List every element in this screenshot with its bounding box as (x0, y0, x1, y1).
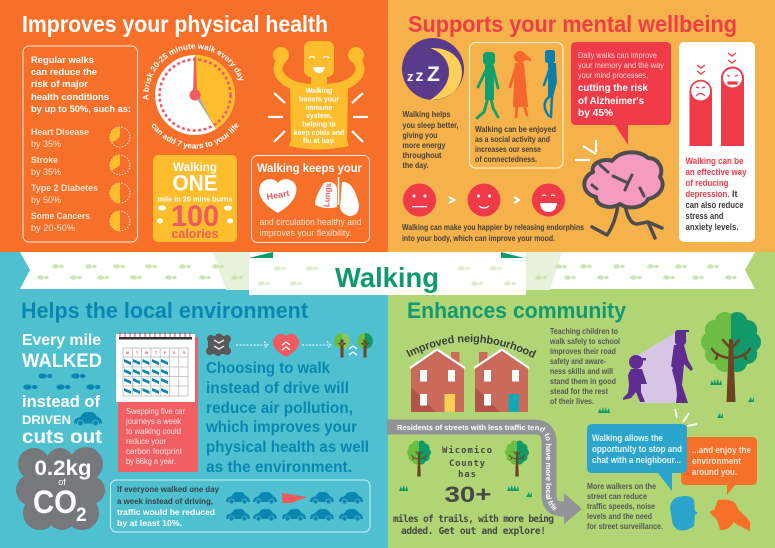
callout: Alzheimer's: your memory and the way (578, 60, 665, 70)
panel: major health conditions (23, 46, 138, 242)
icon: happy brain running (575, 140, 663, 238)
panel: depression: Walking can be (686, 156, 744, 166)
list: conditions: Type 2 Diabetes (31, 183, 98, 194)
icon: calendar: T (136, 351, 139, 355)
text: immune system: system, (306, 113, 332, 120)
text: regular walks: risk of major (31, 79, 88, 90)
panel: depression: It (732, 189, 738, 199)
text: teaching children: ness skills and will (550, 366, 613, 376)
background: community quadrant (388, 252, 775, 548)
panel: traffic reduced: If everyone walked one day (117, 484, 219, 494)
text block: every mile walked: Every mile (22, 332, 101, 349)
icon: two houses (410, 350, 529, 412)
icon: calendar: F (164, 351, 167, 355)
text: more walkers: levels and the need (587, 511, 652, 521)
panel: walking keeps your heart and lungs (252, 156, 370, 242)
panel: calendar and carbon footprint: journeys a week (125, 416, 182, 426)
text: immune system: flu at bay. (303, 138, 335, 145)
text: sleep better: giving you (402, 130, 438, 140)
text: teaching children: stand them in good (550, 376, 616, 386)
list: conditions: Heart Disease (31, 127, 89, 138)
callout: Alzheimer's (571, 42, 671, 145)
icon: rows of cars (226, 492, 363, 521)
callout: chat with a neighbour: Walking allows the (592, 433, 663, 443)
panel: depression: stress and (686, 211, 724, 221)
text: sleep better: you sleep better, (402, 120, 458, 130)
text: teaching children: of their lives. (550, 396, 594, 406)
icon: moon and zzz: z (407, 69, 414, 84)
text: teaching children: safety and aware- (550, 356, 606, 366)
clock: brisk walk (142, 44, 244, 150)
heading: mental wellbeing: Supports your mental wellbeing (408, 11, 737, 37)
icon: footprints (23, 373, 100, 390)
text: choosing to walk: instead of drive will (206, 380, 349, 397)
text: sleep better (402, 109, 458, 170)
text block: every mile walked (22, 332, 103, 448)
text: Wicomico County trails: added. Get out and explore! (401, 526, 546, 537)
clock: brisk walk: can add 7 years to your life (152, 124, 239, 150)
text: choosing to walk: as the environment. (206, 459, 352, 476)
icon: sad bars (690, 53, 744, 146)
icon: calendar: W (145, 351, 149, 355)
callout: enjoy the environment: environment (692, 456, 741, 466)
panel: social activity (470, 42, 563, 168)
text: regular walks: can reduce the (31, 67, 97, 78)
callout: Alzheimer's: Daily walks can improve (578, 50, 657, 60)
text: regular walks (31, 55, 131, 115)
icon: adult and child walking (623, 330, 693, 403)
arrow road with text: Residents of streets with less traffic tend to have more local friends (398, 424, 556, 510)
panel: social activity: as a social activity and (475, 134, 550, 144)
panel: depression: anxiety levels. (686, 222, 738, 232)
panel: depression (679, 42, 755, 242)
list: conditions: Stroke (31, 155, 58, 166)
list: conditions (31, 127, 98, 234)
text: immune system: helping to (302, 122, 336, 128)
cloud: CO2: CO (33, 484, 77, 520)
text: choosing to walk: reduce air pollution, (206, 400, 353, 417)
heading: physical health: Improves your physical health (22, 11, 328, 37)
icon: three faces (403, 184, 565, 216)
text: immune system (294, 88, 344, 145)
background: physical health quadrant (0, 0, 388, 252)
callout: Alzheimer's: of Alzheimer's (578, 96, 644, 107)
panel: social activity: Walking can be enjoyed (475, 124, 556, 134)
text: more walkers: More walkers on the (587, 481, 656, 491)
panel: depression: of reducing (686, 178, 728, 188)
text: endorphins: Walking can make you happier by releasing endorphins (402, 222, 584, 232)
icon: moon and zzz (402, 38, 464, 100)
text: regular walks: by up to 50%, such as: (31, 104, 131, 115)
panel: traffic reduced: by at least 10%. (117, 518, 182, 528)
text block: every mile walked: cuts out (22, 427, 103, 448)
panel: calendar and carbon footprint: to walking could (126, 426, 181, 436)
callout: chat with a neighbour: chat with a neighbour... (592, 455, 681, 465)
icon: calendar (116, 332, 195, 402)
banner title: Walking (335, 262, 439, 293)
callout: enjoy the environment: around you. (692, 467, 737, 477)
cloud: CO2: 0.2kg (34, 457, 92, 480)
icon: calendar: S (173, 351, 176, 355)
text: endorphins: into your body, which can improve your mood. (402, 233, 555, 243)
text: immune system: Walking (306, 88, 332, 95)
list: conditions: by 35% (31, 139, 62, 150)
text: endorphins (402, 222, 584, 243)
panel: walking one mile: Walking (173, 160, 217, 174)
panel: traffic reduced: a week instead of driving, (117, 496, 213, 506)
panel: traffic reduced: traffic would be reduced (117, 507, 215, 517)
callout: Alzheimer's: cutting the risk (578, 83, 648, 94)
text: teaching children: walk safely to school (549, 336, 620, 346)
text: sleep better: the day. (402, 160, 428, 170)
decorative grass (399, 379, 754, 497)
panel: depression: can also reduce (686, 200, 744, 210)
text: Wicomico County trails: miles of trails, with more being (393, 514, 554, 525)
icon: calendar: T (155, 351, 158, 355)
list: conditions: Some Cancers (31, 211, 90, 222)
text: Wicomico County trails (393, 445, 554, 537)
text: teaching children: stead for the rest (550, 386, 608, 396)
text: choosing to walk: Choosing to walk (206, 360, 330, 377)
text: teaching children: Teaching children to (550, 326, 618, 336)
icon row: cloud to heart to trees (206, 333, 373, 357)
panel: walking one mile: calories (172, 227, 219, 241)
background: mental wellbeing quadrant (388, 0, 775, 252)
callout: Alzheimer's: by 45% (578, 108, 613, 119)
icon: calendar: S (183, 351, 186, 355)
panel: depression: depression. (686, 189, 730, 199)
text: regular walks: Regular walks (31, 55, 94, 66)
panel: walking one mile: 100 (171, 200, 219, 233)
icon: lungs: Lungs (322, 182, 333, 207)
text: immune system: boosts your (299, 96, 339, 104)
text: immune system: immune (306, 105, 333, 112)
icon: car (74, 412, 102, 426)
heading: local environment: Helps the local environment (21, 298, 308, 323)
text: teaching children: improves their road (550, 346, 616, 356)
icon: blue head (670, 496, 698, 530)
panel: traffic reduced (110, 480, 370, 532)
cloud: CO2 (16, 447, 105, 530)
text: sleep better: more energy (402, 140, 446, 150)
panel: social activity: increases our sense (475, 144, 541, 154)
panel: depression: an effective way (686, 167, 746, 177)
arrow road with text (387, 420, 582, 524)
icon: calendar: M (126, 351, 129, 355)
heading: enhances community: Enhances community (407, 298, 626, 323)
callout: enjoy the environment: ...and enjoy the (692, 445, 751, 455)
panel: walking one mile (153, 155, 237, 242)
icon: orange head (710, 500, 750, 531)
list: conditions: by 35% (31, 167, 62, 178)
panel: walking keeps your heart and lungs: and circulation healthy and (260, 217, 362, 227)
icon: green walker (477, 52, 498, 118)
callout: Alzheimer's: your mind processes, (578, 70, 648, 80)
panel: calendar and carbon footprint: carbon footprint (126, 446, 183, 456)
text: immune system: keep colds and (294, 130, 344, 137)
text: sleep better: Walking helps (402, 109, 451, 119)
panel: walking keeps your heart and lungs: Walking keeps your (257, 163, 363, 175)
banner ribbon (20, 252, 755, 295)
cloud: CO2: 2 (76, 505, 87, 526)
panel: walking one mile: mile in 20 mins burns (158, 194, 232, 204)
text: Wicomico County trails: Wicomico (442, 445, 492, 456)
text: regular walks: health conditions (31, 92, 109, 103)
callout: enjoy the environment (681, 437, 757, 495)
cloud: CO2: of (58, 477, 66, 487)
panel: calendar and carbon footprint: reduce your (126, 436, 166, 446)
text: choosing to walk (205, 360, 369, 476)
text: Wicomico County trails: has (458, 470, 476, 480)
icon: strong figure with immune text (268, 41, 368, 150)
text: choosing to walk: physical health as well (206, 439, 369, 456)
text: Wicomico County trails: County (449, 459, 486, 469)
list: conditions: by 50% (31, 195, 62, 206)
text: choosing to walk: which improves your (205, 419, 357, 436)
background: environment quadrant (0, 252, 388, 548)
icon: orange walker (510, 51, 531, 117)
curved label: improved neighbourhoods: Improved neighbourhoods (406, 334, 536, 358)
text: sleep better: throughout (402, 150, 442, 160)
text: teaching children (549, 326, 620, 406)
text: more walkers: street can reduce (587, 491, 647, 501)
curved label: improved neighbourhoods (406, 334, 536, 358)
callout: chat with a neighbour (587, 424, 687, 491)
icon: blue walker (544, 50, 557, 117)
text: Wicomico County trails: 30+ (444, 482, 492, 507)
panel: social activity: of connectedness. (475, 154, 537, 164)
clock: brisk walk: A brisk 20-25 minute walk every day (142, 44, 244, 100)
callout: chat with a neighbour: opportunity to stop and (592, 444, 682, 454)
text: more walkers: for street surveillance. (587, 521, 663, 531)
icon: sweat drops (157, 206, 233, 224)
icon: moon and zzz: z (416, 68, 424, 85)
small trees (407, 440, 529, 476)
list: conditions: by 20-50% (31, 223, 76, 234)
panel: calendar and carbon footprint: Swapping five car (126, 406, 185, 416)
text: more walkers (587, 481, 663, 531)
icon: large tree (701, 312, 761, 402)
icon: heart: Heart (266, 188, 290, 202)
text block: every mile walked: instead of (22, 393, 100, 411)
text block: every mile walked: DRIVEN (22, 413, 71, 427)
text: more walkers: traffic speeds, noise (587, 501, 655, 511)
text block: every mile walked: WALKED (22, 351, 102, 372)
panel: walking one mile: ONE (172, 170, 218, 196)
panel: walking keeps your heart and lungs: improves your flexibility. (260, 228, 352, 238)
panel: calendar and carbon footprint: by 86kg a year. (126, 456, 176, 466)
panel: calendar and carbon footprint (116, 332, 198, 472)
pie charts (110, 127, 130, 231)
icon: moon and zzz: Z (427, 63, 440, 86)
